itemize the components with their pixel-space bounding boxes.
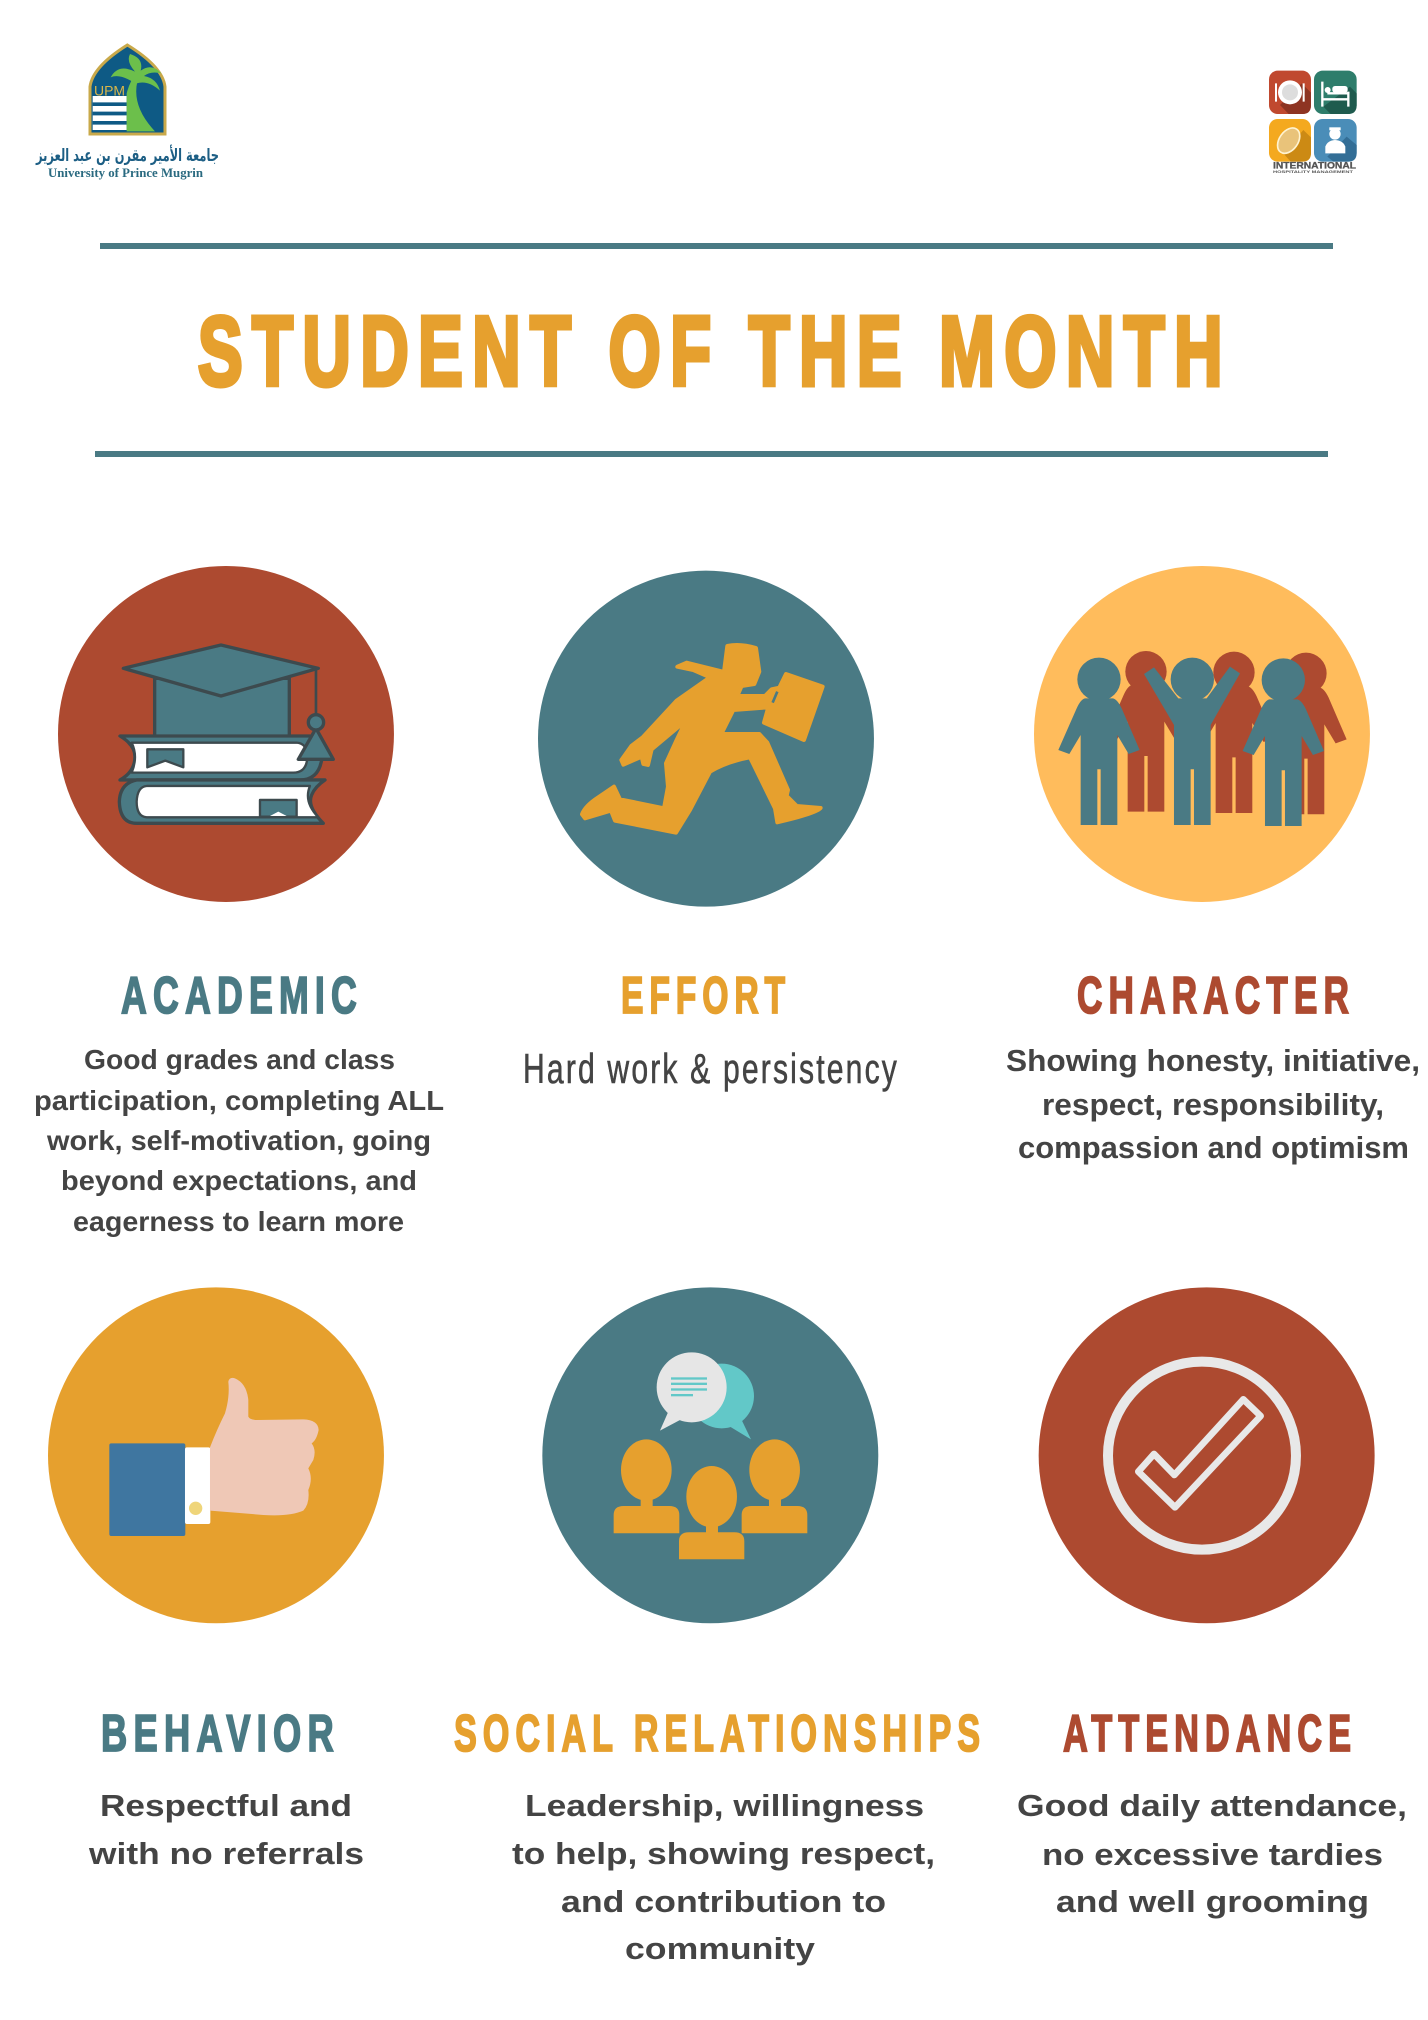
icon: check mark in circle bbox=[1039, 1287, 1375, 1623]
text: effort description: Hard work & persistency bbox=[523, 1045, 899, 1092]
icon: people talking bbox=[542, 1287, 878, 1623]
text: social relationships description: community bbox=[625, 1931, 816, 1966]
panel: behavior bbox=[48, 1287, 384, 1871]
icon: group of people bbox=[1034, 566, 1370, 902]
text: character description bbox=[1006, 1043, 1420, 1165]
logo: International Hospitality Management: INTERNATIONAL bbox=[1273, 160, 1357, 170]
text: academic description: beyond expectations, and bbox=[61, 1165, 417, 1196]
text: social relationships description: Leadership, willingness bbox=[525, 1788, 924, 1823]
text: behavior description: with no referrals bbox=[88, 1836, 364, 1871]
text: social relationships description: and contribution to bbox=[561, 1884, 886, 1919]
heading: social relationships: SOCIAL RELATIONSHIPS bbox=[454, 1705, 986, 1763]
logo: International Hospitality Management bbox=[1269, 71, 1357, 174]
top rule bbox=[100, 243, 1333, 249]
panel: social relationships bbox=[454, 1287, 986, 1966]
heading: effort: EFFORT bbox=[621, 967, 791, 1025]
text: attendance description: no excessive tardies bbox=[1042, 1837, 1383, 1872]
text: behavior description: Respectful and bbox=[100, 1788, 352, 1823]
icon: graduation cap on books bbox=[58, 566, 394, 902]
text: academic description: work, self-motivation, going bbox=[46, 1125, 431, 1156]
text: attendance description bbox=[1017, 1788, 1407, 1919]
text: attendance description: Good daily attendance, bbox=[1017, 1788, 1407, 1823]
panel: character bbox=[1006, 566, 1420, 1165]
icon: thumbs up bbox=[48, 1287, 384, 1623]
icon: running businessman bbox=[538, 571, 874, 907]
panel: attendance bbox=[1017, 1287, 1407, 1919]
logo: International Hospitality Management: HOSPITALITY MANAGEMENT bbox=[1273, 170, 1354, 174]
text: academic description: eagerness to learn more bbox=[73, 1206, 404, 1237]
text: social relationships description: to help, showing respect, bbox=[512, 1836, 935, 1871]
panel: effort bbox=[523, 571, 899, 1092]
text: social relationships description bbox=[512, 1788, 935, 1966]
logo: University of Prince Mugrin: University of Prince Mugrin bbox=[48, 166, 203, 180]
text: academic description: Good grades and class bbox=[84, 1044, 395, 1075]
heading: behavior: BEHAVIOR bbox=[101, 1705, 340, 1763]
text: character description: compassion and optimism bbox=[1018, 1130, 1409, 1165]
bottom rule bbox=[95, 451, 1328, 457]
panel: academic bbox=[34, 566, 444, 1237]
logo: University of Prince Mugrin bbox=[35, 45, 219, 180]
text: character description: Showing honesty, initiative, bbox=[1006, 1043, 1420, 1078]
text: academic description: participation, completing ALL bbox=[34, 1085, 444, 1116]
text: character description: respect, responsibility, bbox=[1042, 1087, 1384, 1122]
logo: University of Prince Mugrin: UPM bbox=[94, 83, 125, 99]
heading: academic: ACADEMIC bbox=[121, 967, 363, 1025]
text: academic description bbox=[34, 1044, 444, 1237]
text: behavior description bbox=[88, 1788, 364, 1871]
text: attendance description: and well grooming bbox=[1056, 1884, 1369, 1919]
logo: University of Prince Mugrin: جامعة الأمير مقرن بن عبد العزيز bbox=[35, 145, 219, 166]
